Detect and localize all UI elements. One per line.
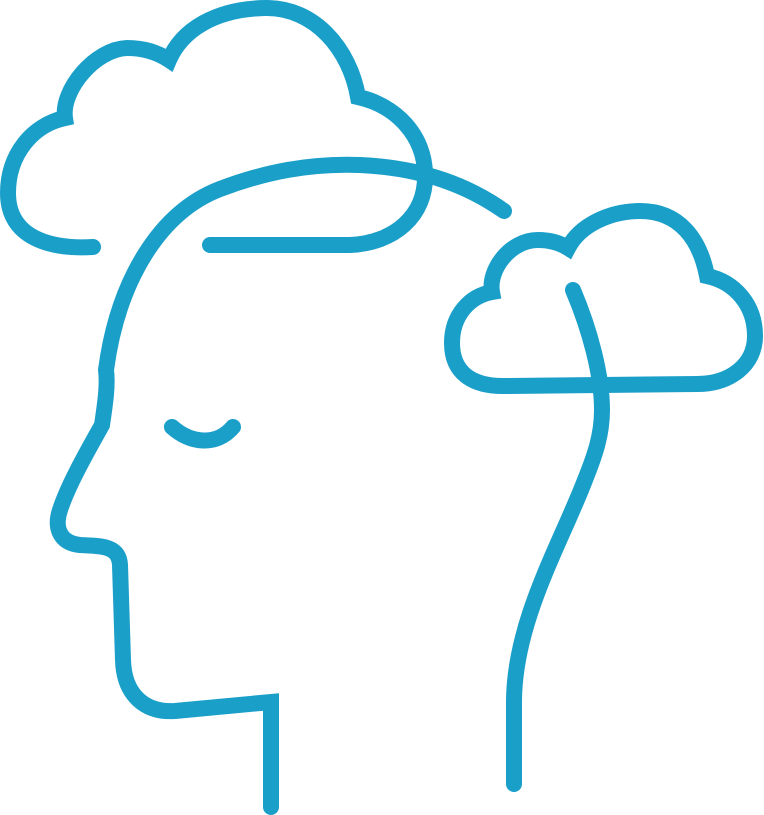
large cloud outline bbox=[8, 8, 425, 247]
head profile outline bbox=[58, 165, 504, 807]
back of neck line bbox=[514, 290, 602, 784]
closed eye bbox=[172, 427, 233, 441]
small cloud outline bbox=[452, 211, 755, 386]
